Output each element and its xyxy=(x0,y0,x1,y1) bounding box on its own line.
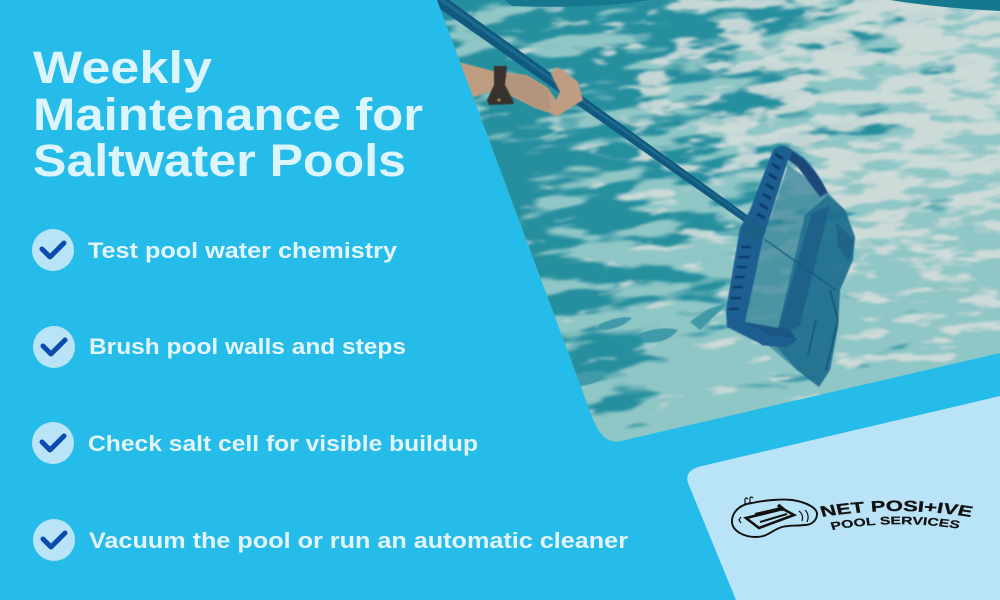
water: bright shimmer xyxy=(466,0,1000,415)
arm and hand xyxy=(455,61,558,117)
water: dark ripples xyxy=(437,0,960,430)
wristwatch xyxy=(487,66,514,105)
logo panel xyxy=(687,396,1000,600)
logo icon: pool with lounger xyxy=(732,497,817,537)
logo wordmark: POOL SERVICES xyxy=(830,516,960,530)
item: vacuum the pool: Vacuum the pool or run an automatic cleaner xyxy=(89,528,628,553)
checklist xyxy=(32,229,628,561)
title: Saltwater Pools xyxy=(33,135,406,186)
item: brush walls and steps: Brush pool walls and steps xyxy=(89,334,406,359)
skimmer frame xyxy=(726,146,828,347)
logo wordmark: NET POSI+IVE xyxy=(820,500,973,517)
item: test water chemistry: Test pool water chemistry xyxy=(88,238,398,263)
logo wordmark xyxy=(820,500,973,530)
title: Weekly xyxy=(33,42,212,93)
item: test water chemistry xyxy=(32,229,398,271)
item: brush walls and steps xyxy=(33,326,406,368)
item: vacuum the pool xyxy=(33,519,628,561)
water: dark patches near bottom xyxy=(572,304,728,386)
water base xyxy=(430,0,1000,450)
fingers over pole xyxy=(549,67,583,116)
item: check salt cell xyxy=(32,422,478,464)
skimmer pole xyxy=(426,0,754,226)
photo: pool skimmer in water xyxy=(437,0,1000,442)
item: check salt cell: Check salt cell for visible buildup xyxy=(88,431,478,456)
pool edge at top xyxy=(505,0,1000,11)
title: Maintenance for xyxy=(33,89,423,140)
title xyxy=(33,42,423,186)
logo: Net Positive Pool Services xyxy=(731,496,973,538)
skimmer net mesh xyxy=(743,165,855,387)
